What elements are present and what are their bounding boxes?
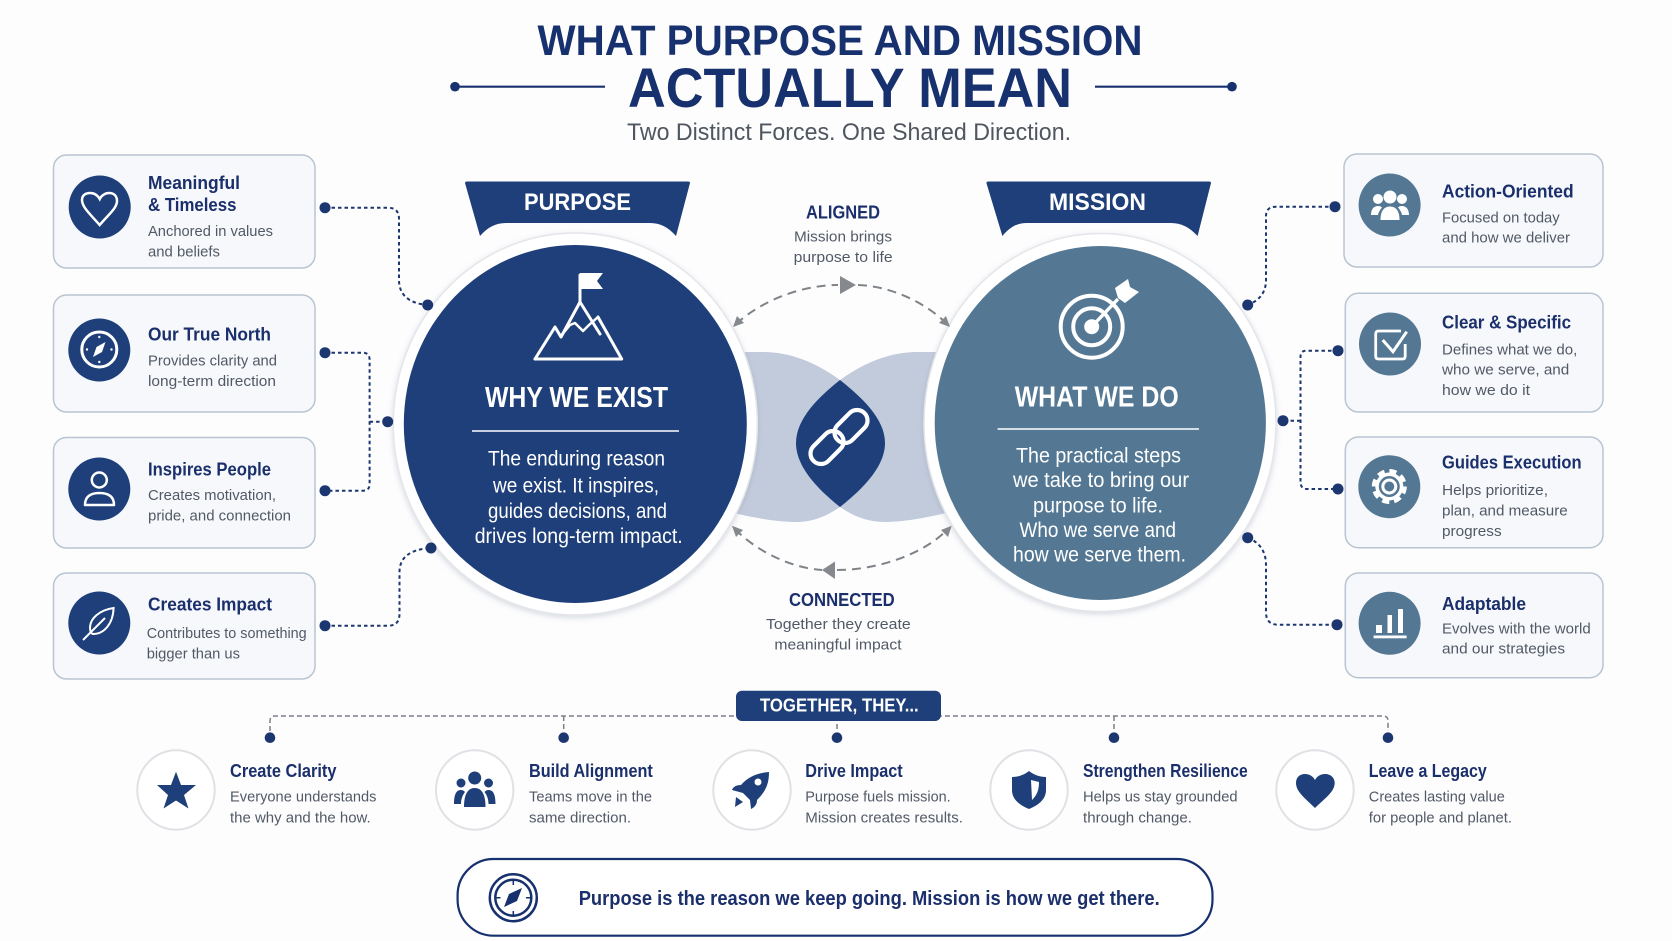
- card: guides execution: plan, and measure: [1442, 502, 1568, 519]
- benefit: build alignment: [436, 750, 653, 830]
- icon: team: [1359, 174, 1421, 236]
- icon: compass outline: [490, 874, 537, 921]
- card: inspires people: Creates motivation,: [148, 487, 276, 504]
- aligned label: [794, 202, 893, 266]
- benefit: create clarity: Everyone understands: [230, 789, 376, 806]
- title: ACTUALLY MEAN: [628, 56, 1072, 119]
- benefit: create clarity: the why and the how.: [230, 809, 371, 826]
- card: adaptable: and our strategies: [1442, 641, 1565, 658]
- connected label: Together they create: [766, 616, 911, 633]
- title: [538, 17, 1142, 119]
- purpose body text: we exist. It inspires,: [492, 475, 659, 498]
- card: creates impact: Contributes to something: [147, 625, 307, 642]
- card: guides execution: Helps prioritize,: [1442, 482, 1548, 499]
- benefit: build alignment: same direction.: [529, 809, 631, 826]
- icon: person: [68, 458, 130, 520]
- card: meaningful and timeless: and beliefs: [148, 244, 220, 261]
- benefit: leave a legacy: for people and planet.: [1369, 809, 1512, 826]
- card: action-oriented: and how we deliver: [1442, 229, 1570, 246]
- callout: closing statement: Purpose is the reason we keep going. Mission is how we get there.: [579, 888, 1160, 910]
- together connector line: [265, 716, 1393, 743]
- icon: shield: [990, 750, 1068, 830]
- aligned label: purpose to life: [794, 249, 893, 266]
- card: meaningful and timeless: Meaningful: [148, 173, 240, 193]
- card: our true north: long-term direction: [148, 373, 276, 390]
- card: our true north: Our True North: [148, 325, 271, 345]
- mission body text: how we serve them.: [1013, 544, 1186, 567]
- icon: compass: [68, 318, 130, 382]
- benefit: drive impact: [713, 750, 963, 830]
- callout: closing statement: [458, 859, 1213, 936]
- card: adaptable: [1345, 573, 1603, 678]
- subtitle: Two Distinct Forces. One Shared Direction.: [627, 119, 1071, 146]
- card: inspires people: [54, 438, 315, 548]
- arrow: upper arc: [733, 276, 950, 327]
- title: WHAT PURPOSE AND MISSION: [538, 17, 1142, 65]
- card: action-oriented: [1344, 154, 1603, 267]
- together badge: TOGETHER, THEY...: [760, 696, 919, 716]
- icon: target with arrow: [1061, 279, 1139, 358]
- mission body text: [1012, 445, 1189, 567]
- icon: team: [436, 750, 513, 830]
- card: inspires people: pride, and connection: [148, 508, 291, 525]
- banner: mission: [986, 182, 1211, 236]
- purpose body text: guides decisions, and: [488, 500, 667, 523]
- connectors: right: [1242, 201, 1344, 630]
- icon: solid heart: [1276, 750, 1354, 830]
- icon: leaf: [68, 592, 130, 654]
- card: action-oriented: Action-Oriented: [1442, 181, 1574, 201]
- venn overlap background: [730, 352, 950, 522]
- mission heading: WHAT WE DO: [1015, 382, 1179, 414]
- benefit: leave a legacy: Leave a Legacy: [1369, 761, 1487, 781]
- panel: mission circle: [924, 234, 1276, 612]
- title rule left: [450, 82, 605, 91]
- banner: purpose: [465, 182, 690, 236]
- benefit: drive impact: Purpose fuels mission.: [805, 789, 951, 806]
- card: clear and specific: how we do it: [1442, 382, 1531, 399]
- mission body text: we take to bring our: [1012, 469, 1189, 492]
- benefit: leave a legacy: [1276, 750, 1512, 830]
- panel: purpose circle: [393, 233, 757, 615]
- card: guides execution: [1345, 437, 1603, 548]
- aligned label: Mission brings: [794, 229, 892, 246]
- connected label: meaningful impact: [774, 636, 902, 653]
- arrow: lower arc: [732, 526, 952, 579]
- benefit: strengthen resilience: Helps us stay grounded: [1083, 789, 1238, 806]
- icon: link lens: [796, 380, 885, 507]
- card: clear and specific: [1345, 293, 1603, 412]
- purpose body text: drives long-term impact.: [475, 525, 683, 548]
- card: our true north: [54, 295, 315, 412]
- card: adaptable: Adaptable: [1442, 594, 1526, 614]
- benefit: leave a legacy: Creates lasting value: [1369, 789, 1505, 806]
- together badge: [736, 691, 941, 721]
- purpose body text: [475, 448, 683, 548]
- benefit: build alignment: Teams move in the: [529, 789, 652, 806]
- icon: gear: [1358, 455, 1420, 518]
- card: meaningful and timeless: Anchored in values: [148, 223, 273, 240]
- card: creates impact: bigger than us: [147, 646, 240, 663]
- banner: purpose: PURPOSE: [524, 189, 631, 216]
- benefit: drive impact: Drive Impact: [805, 761, 903, 781]
- benefit: create clarity: Create Clarity: [230, 761, 336, 781]
- icon: mountain with flag: [535, 273, 622, 359]
- benefit: strengthen resilience: [990, 750, 1248, 830]
- card: creates impact: [54, 573, 315, 679]
- card: inspires people: Inspires People: [148, 460, 271, 480]
- purpose body text: The enduring reason: [488, 448, 665, 471]
- card: creates impact: Creates Impact: [148, 595, 272, 615]
- icon: checkbox: [1359, 312, 1421, 376]
- card: clear and specific: who we serve, and: [1441, 362, 1569, 379]
- benefit: drive impact: Mission creates results.: [805, 809, 963, 826]
- connected label: CONNECTED: [789, 590, 895, 610]
- card: guides execution: progress: [1442, 523, 1502, 540]
- banner: mission: MISSION: [1049, 189, 1146, 216]
- icon: star: [137, 750, 215, 830]
- card: our true north: Provides clarity and: [148, 353, 277, 370]
- icon: bar chart: [1359, 592, 1421, 655]
- card: action-oriented: Focused on today: [1442, 209, 1560, 226]
- connectors: left: [320, 202, 436, 631]
- mission body text: Who we serve and: [1020, 519, 1176, 542]
- mission body text: purpose to life.: [1033, 495, 1163, 518]
- connected label: [766, 590, 911, 653]
- title rule right: [1095, 82, 1237, 91]
- benefit: build alignment: Build Alignment: [529, 761, 653, 781]
- purpose heading: WHY WE EXIST: [485, 382, 668, 414]
- card: adaptable: Evolves with the world: [1442, 620, 1591, 637]
- card: guides execution: Guides Execution: [1442, 452, 1582, 472]
- icon: heart: [69, 176, 131, 238]
- mission body text: The practical steps: [1016, 445, 1181, 468]
- card: meaningful and timeless: [54, 155, 315, 268]
- card: clear and specific: Clear & Specific: [1442, 312, 1571, 332]
- icon: rocket: [713, 750, 791, 830]
- benefit: strengthen resilience: Strengthen Resilience: [1083, 761, 1248, 781]
- card: clear and specific: Defines what we do,: [1442, 341, 1577, 358]
- benefit: create clarity: [137, 750, 376, 830]
- aligned label: ALIGNED: [806, 202, 880, 222]
- benefit: strengthen resilience: through change.: [1083, 809, 1192, 826]
- card: meaningful and timeless: & Timeless: [148, 195, 236, 215]
